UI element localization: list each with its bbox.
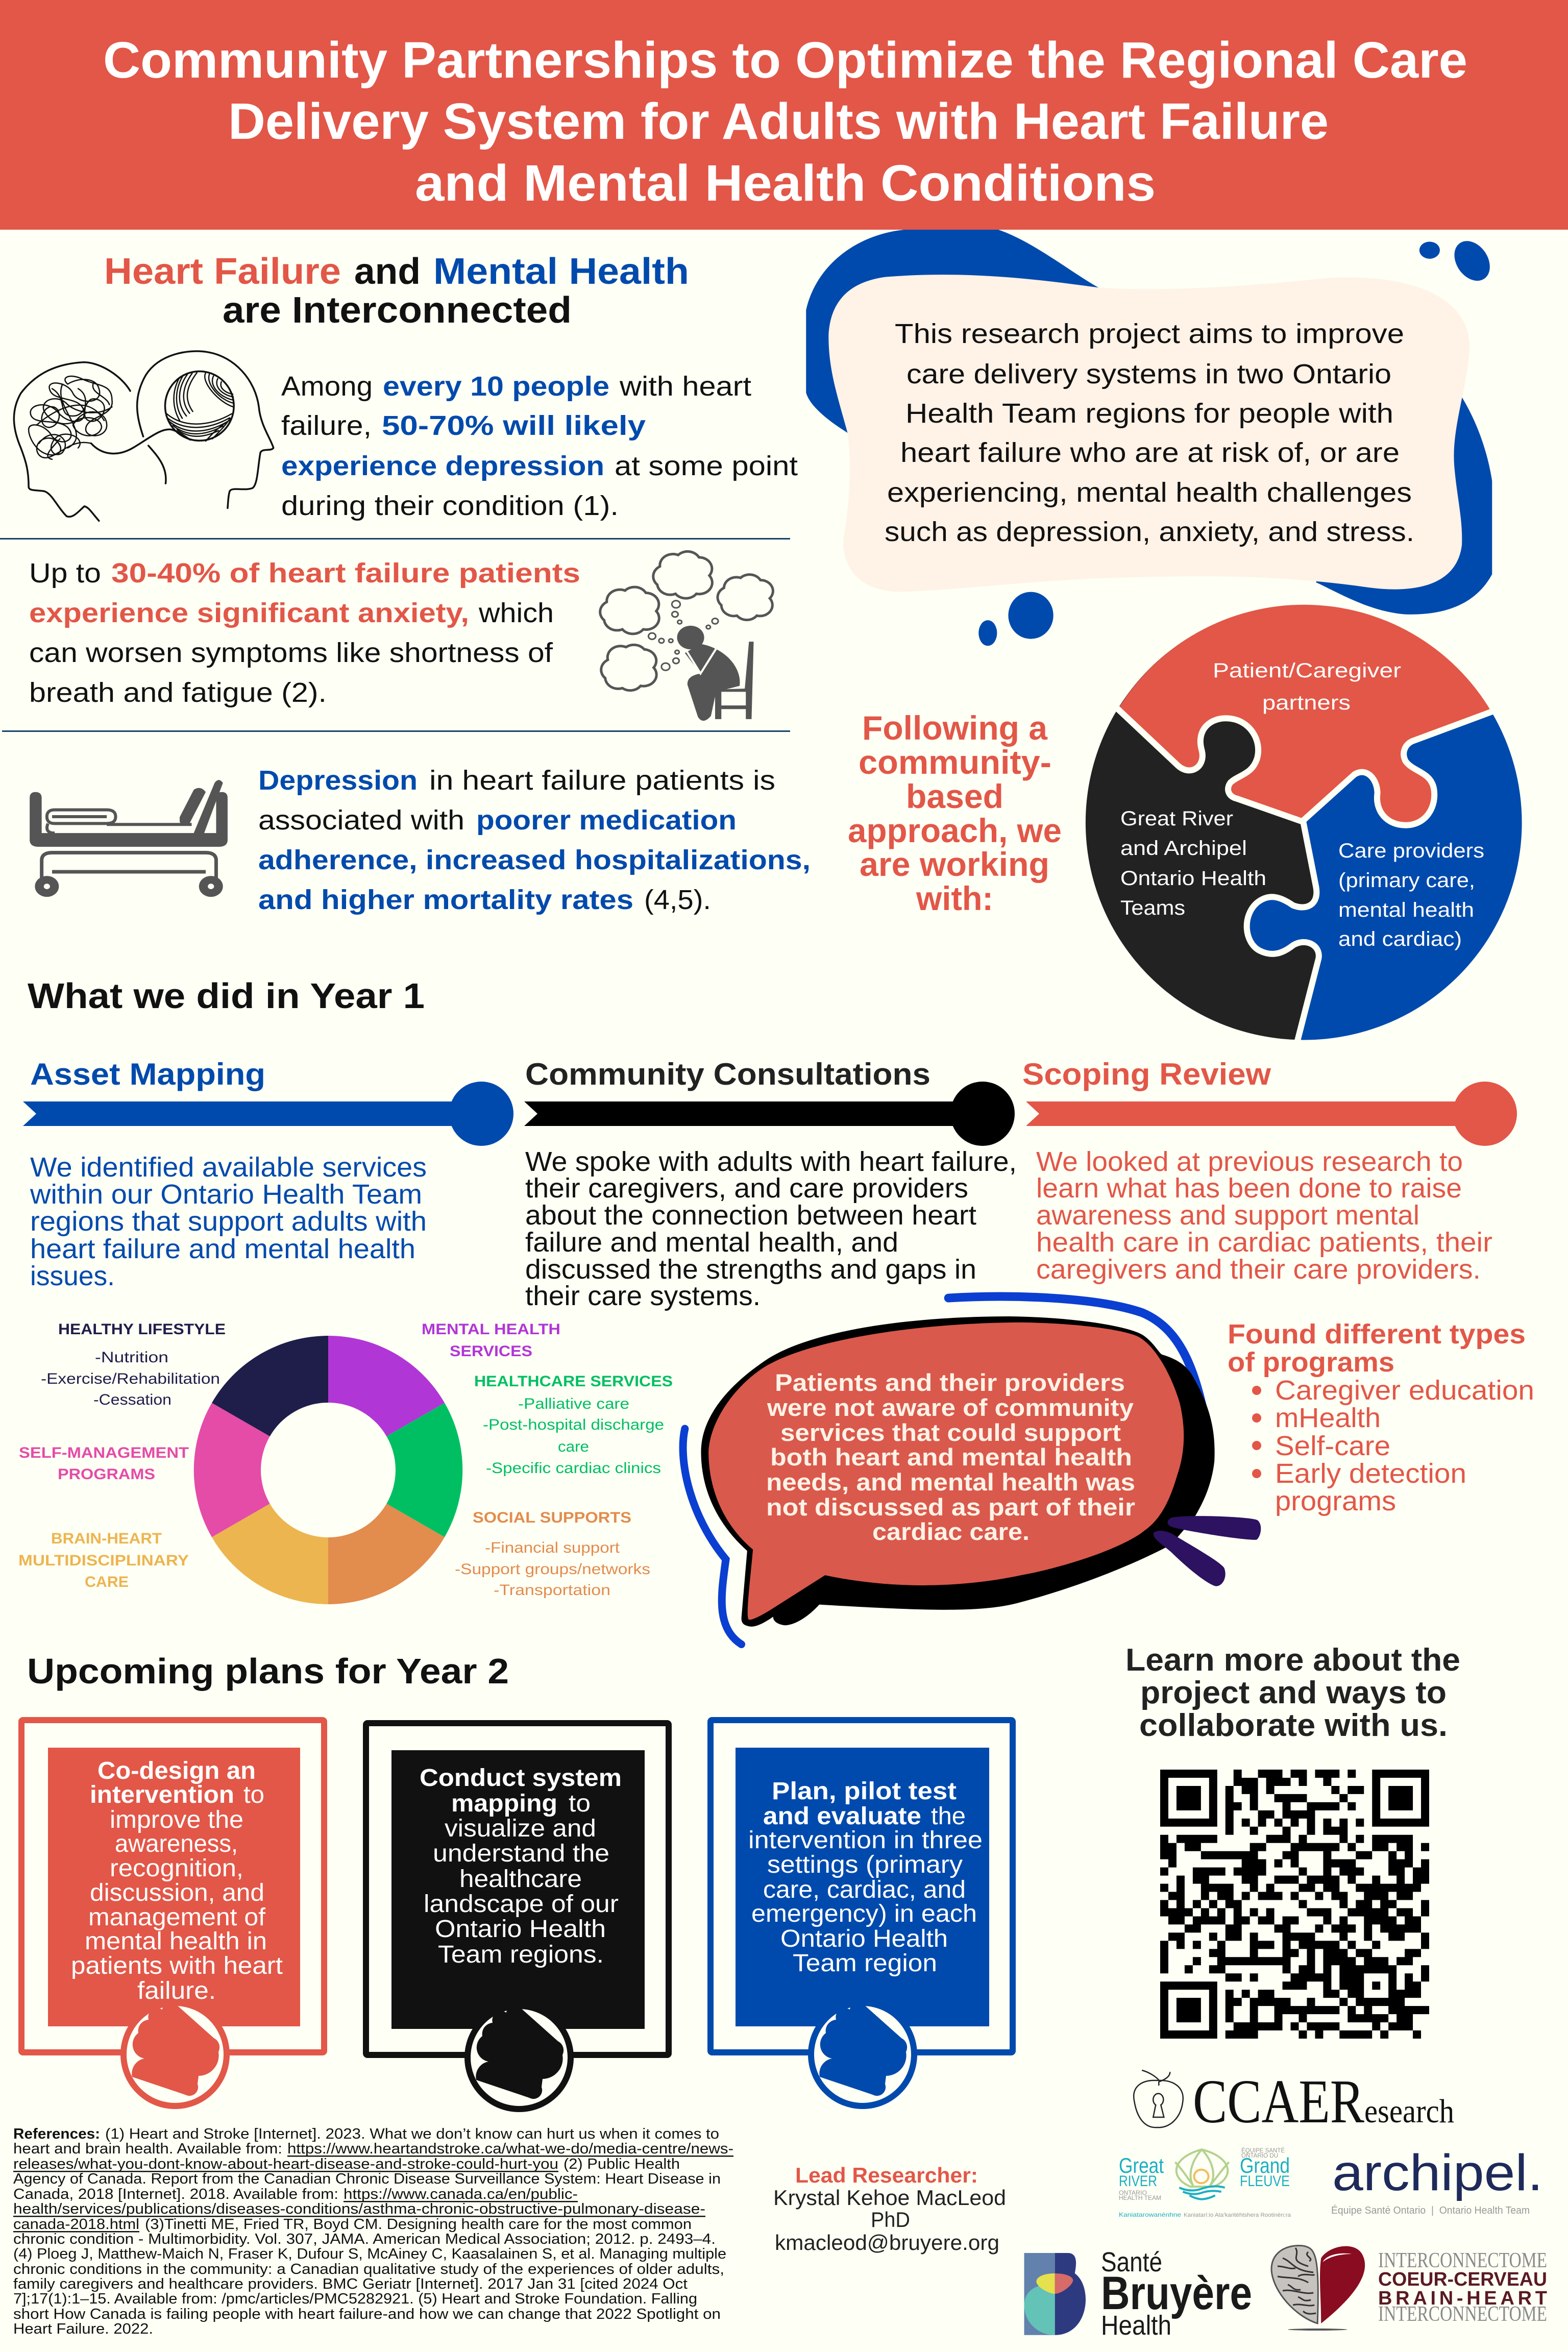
donut label: mental health services [422,1321,560,1360]
text block: references: (2) Public Health [564,2156,680,2172]
panel: co-design card: to [243,1781,264,1808]
donut label: healthy lifestyle: -Exercise/Rehabilitation [41,1370,220,1387]
heading: heart failure and mental health interconnected: Heart Failure [104,251,341,292]
text block: anxiety statistic: which [478,598,554,628]
heading: upcoming plans: Upcoming plans for Year 2 [27,1651,509,1691]
chart: partner puzzle circle: and cardiac) [1338,928,1462,950]
donut label: healthcare services: HEALTHCARE SERVICES [474,1373,673,1390]
chart: partner puzzle circle: Ontario Health [1120,867,1266,890]
heading: learn more: project and ways to [1140,1675,1447,1710]
panel: asset mapping: regions that support adults with [30,1206,427,1237]
icon: tangled brain and yarn heads [14,351,274,521]
callout: speech bubble finding: needs, and mental health was [766,1468,1135,1496]
heading: community-based approach: based [906,777,1003,815]
panel: scoping review [1022,1057,1517,1285]
donut label: mental health services: MENTAL HEALTH [422,1321,560,1338]
donut label: brain-heart multidisciplinary care: BRAIN-HEART [51,1530,162,1547]
chart: partner puzzle circle: and Archipel [1120,837,1247,860]
text block: types of programs list: of programs [1228,1347,1394,1378]
logo: Great River / Grand Fleuve: Grand [1240,2153,1290,2177]
donut label: social supports: SOCIAL SUPPORTS [473,1509,631,1526]
text block: anxiety statistic: can worsen symptoms like shortness of [29,638,553,668]
panel: pilot test card: Plan, pilot test [772,1778,957,1805]
logo: Great River / Grand Fleuve: ÉQUIPE SANTÉ [1241,2146,1285,2154]
panel: asset mapping: heart failure and mental health [30,1234,415,1264]
text block: references: Agency of Canada. Report from the Canadian Chronic Disease Surveillance System: Heart Disease in [13,2171,721,2187]
panel: co-design card: mental health in [85,1928,267,1955]
header banner: Community Partnerships to Optimize the Regional Care [103,32,1467,89]
panel: research aim speech blob: This research project aims to improve [895,318,1404,349]
donut label: healthy lifestyle [41,1321,226,1408]
panel: system mapping card: Ontario Health [435,1916,606,1943]
text block: anxiety statistic: 30-40% of heart failure patients [111,558,580,589]
panel: pilot test card: Ontario Health [780,1925,948,1952]
donut label: social supports [455,1509,650,1599]
text block: types of programs list: Found different types [1228,1319,1526,1350]
panel: asset mapping: issues. [30,1261,115,1291]
logo: Great River / Grand Fleuve: Kaniatarowanénhne [1119,2211,1181,2218]
panel: pilot test card: settings (primary [767,1851,963,1878]
panel: scoping review: awareness and support mental [1036,1200,1419,1231]
logo: Great River / Grand Fleuve: RIVER [1119,2173,1157,2190]
logo: brain-heart interconnectome: COEUR-CERVEAU [1378,2269,1547,2290]
donut label: healthcare services: -Palliative care [518,1395,629,1412]
logo: CCAE Research: esearch [1364,2093,1454,2130]
text block: references: (1) Heart and Stroke [Internet]. 2023. What we don’t know can hurt us when it comes to [105,2126,719,2142]
text block: references: family caregivers and healthcare providers. BMC Geriatr [Internet]. 2017 Jan 31 [cited 2024 Oct [13,2276,688,2292]
icon: hospital bed [30,780,228,897]
panel: asset mapping: We identified available services [30,1152,427,1183]
panel: community consultations: about the connection between heart [525,1200,976,1231]
panel: scoping review: health care in cardiac patients, their [1036,1227,1492,1258]
icon: person with thought clouds [600,551,773,721]
chart: partner puzzle circle: mental health [1338,899,1474,921]
donut label: brain-heart multidisciplinary care [18,1530,189,1590]
panel: research aim speech blob [828,275,1469,592]
panel: community consultations: Community Consultations [525,1057,930,1091]
text block: references: short How Canada is failing people with heart failure-and how we can change that 2022 Spotlight on [13,2306,721,2322]
chart: partner puzzle circle: Teams [1120,897,1185,919]
logo: Bruyère Health: Health [1101,2310,1171,2341]
donut label: healthy lifestyle: HEALTHY LIFESTYLE [58,1321,226,1338]
text block: depression outcomes [258,765,811,915]
text block: anxiety statistic: experience significant anxiety, [29,598,469,628]
panel: system mapping card: healthcare [459,1866,582,1893]
logo: Great River / Grand Fleuve: FLEUVE [1240,2173,1290,2190]
panel: research aim speech blob: such as depression, anxiety, and stress. [885,517,1414,547]
panel: asset mapping: within our Ontario Health Team [30,1179,422,1210]
heading: heart failure and mental health interconnected: are Interconnected [223,290,572,331]
donut label: mental health services: SERVICES [450,1343,532,1360]
panel: asset mapping [23,1057,513,1291]
panel: community consultations: their care systems. [525,1281,761,1311]
text block: anxiety statistic [29,558,580,708]
text block: depression statistic [281,371,798,521]
QR code [1160,1770,1429,2039]
text block: lead researcher: kmacleod@bruyere.org [775,2231,999,2255]
panel: community consultations: discussed the strengths and gaps in [525,1254,976,1285]
panel: scoping review: learn what has been done to raise [1036,1173,1462,1204]
chart: partner puzzle circle [1086,605,1522,1042]
text block: depression outcomes: adherence, increased hospitalizations, [258,845,811,875]
panel: pilot test card: the [931,1803,966,1830]
text block: references: heart and brain health. Available from: [13,2141,282,2157]
logo: CCAE Research [1134,2067,1454,2136]
text block: depression outcomes: poorer medication [476,805,737,836]
text block: depression statistic: failure, [281,410,372,441]
donut label: self-management programs: SELF-MANAGEMENT [19,1444,189,1461]
text block: references [13,2126,733,2337]
chart: partner puzzle circle: partners [1262,692,1351,714]
text block: depression outcomes: (4,5). [644,885,711,915]
donut label: brain-heart multidisciplinary care: MULTIDISCIPLINARY [18,1552,189,1569]
donut label: healthy lifestyle: -Cessation [93,1391,172,1408]
heading: learn more [1125,1643,1460,1743]
heading: community-based approach: community- [859,743,1051,781]
text block: references: https://www.heartandstroke.ca/what-we-do/media-centre/news- [287,2141,733,2157]
text block: depression statistic: 50-70% will likely [382,410,646,441]
panel: system mapping card [366,1723,669,2112]
text block: references: (3)Tinetti ME, Fried TR, Boyd CM. Designing health care for the most common [145,2216,692,2233]
heading: community-based approach: approach, we [848,812,1062,849]
text block: references: Heart Failure. 2022. [13,2321,153,2337]
panel: scoping review: caregivers and their care providers. [1036,1254,1481,1285]
panel: system mapping card: understand the [433,1840,609,1867]
chart: partner puzzle circle: Patient/Caregiver [1213,659,1401,682]
panel: pilot test card: care, cardiac, and [763,1876,966,1903]
panel: pilot test card: intervention in three [748,1827,983,1854]
panel: pilot test card: and evaluate [763,1803,921,1830]
text block: references: References: [13,2126,100,2142]
donut label: self-management programs: PROGRAMS [58,1466,155,1483]
callout: speech bubble finding: services that could support [780,1419,1121,1446]
text block: lead researcher: Krystal Kehoe MacLeod [773,2186,1006,2210]
logo: Great River / Grand Fleuve: ONTARIO DU [1241,2152,1278,2159]
panel: scoping review: We looked at previous research to [1036,1146,1463,1177]
logo: Great River / Grand Fleuve [1119,2146,1291,2218]
text block: references: 7];17(1):1–15. Available from: /pmc/articles/PMC5282921. (5) Heart and Stroke Foundation. Falling [13,2291,697,2307]
callout: speech bubble finding: both heart and mental health [770,1443,1132,1471]
logo: Great River / Grand Fleuve: ONTARIO [1119,2189,1147,2196]
donut label: social supports: -Financial support [485,1539,620,1556]
panel: system mapping card: landscape of our [424,1891,619,1918]
callout: speech bubble finding: Patients and their providers [775,1369,1125,1396]
logo: archipel: archipel. [1332,2144,1543,2201]
text block: anxiety statistic: Up to [29,558,101,589]
text block: references: releases/what-you-dont-know-about-heart-disease-and-stroke-could-hurt-you [13,2156,558,2172]
text block: lead researcher: Lead Researcher: [795,2163,978,2187]
logo: Bruyère Health: Bruyère [1101,2267,1252,2319]
panel: community consultations: their caregivers, and care providers [525,1173,968,1204]
callout: speech bubble finding: not discussed as part of their [766,1493,1135,1521]
chart: partner puzzle circle: Great River [1120,807,1233,830]
panel: co-design card: improve the [110,1806,243,1833]
panel: system mapping card: Team regions. [438,1941,604,1968]
donut label: brain-heart multidisciplinary care: CARE [85,1574,129,1590]
panel: pilot test card [710,1720,1013,2109]
text block: references: canada-2018.html [13,2216,139,2233]
heading: community-based approach: Following a [862,709,1048,747]
panel: co-design card: intervention [90,1781,234,1808]
callout: speech bubble finding: were not aware of community [767,1394,1134,1421]
panel: co-design card: Co-design an [97,1757,256,1784]
logo: Bruyère Health [1024,2247,1252,2341]
chart: services donut [194,1336,462,1604]
heading: learn more: collaborate with us. [1139,1708,1448,1743]
text block: depression statistic: at some point [615,451,798,481]
text block: references: https://www.canada.ca/en/public- [344,2186,578,2202]
heading: learn more: Learn more about the [1125,1643,1460,1678]
text block: types of programs list: Caregiver education [1275,1375,1534,1406]
text block: depression statistic: Among [281,371,373,402]
donut label: healthy lifestyle: -Nutrition [95,1349,168,1366]
panel: research aim speech blob: heart failure who are at risk of, or are [900,437,1400,468]
donut label: healthcare services: -Specific cardiac clinics [486,1460,661,1477]
text block: types of programs list: programs [1275,1486,1396,1516]
heading: what we did in year 1: What we did in Year 1 [28,976,425,1016]
panel: system mapping card: Conduct system [420,1765,622,1792]
text block: depression outcomes: and higher mortality rates [258,885,633,915]
panel: co-design card: discussion, and [90,1879,264,1906]
donut label: self-management programs [19,1444,189,1483]
header banner: and Mental Health Conditions [415,155,1156,212]
text block: depression outcomes: in heart failure patients is [429,765,775,796]
text block: depression statistic: with heart [619,371,751,402]
panel: co-design card: recognition, [110,1855,243,1882]
text block: lead researcher: PhD [871,2208,910,2232]
panel: co-design card: management of [88,1904,266,1931]
text block: anxiety statistic: breath and fatigue (2). [29,677,327,708]
heading: community-based approach: are working [860,845,1049,883]
donut label: social supports: -Support groups/networks [455,1561,650,1578]
text block: types of programs list: mHealth [1275,1403,1381,1433]
heading: community-based approach [848,709,1062,917]
text block: references: (4) Ploeg J, Matthew-Maich N, Fraser K, Dufour S, McAiney C, Kaasalainen S, et al. Managing multiple [13,2246,726,2262]
panel: co-design card: failure. [137,1977,216,2004]
panel: co-design card: awareness, [115,1830,238,1857]
header banner [0,0,1568,230]
callout: speech bubble finding: cardiac care. [872,1518,1030,1545]
chart: partner puzzle circle: (primary care, [1338,869,1475,892]
logo: Great River / Grand Fleuve: Great [1119,2153,1164,2177]
heading: heart failure and mental health interconnected [104,251,689,331]
panel: research aim speech blob: care delivery systems in two Ontario [906,359,1391,389]
logo: brain-heart interconnectome: BRAIN-HEART [1378,2288,1547,2309]
logo: Bruyère Health: Santé [1101,2247,1162,2277]
donut label: healthcare services: -Post-hospital discharge [483,1416,664,1433]
heading: heart failure and mental health interconnected: and [354,251,421,292]
panel: system mapping card: mapping [451,1790,557,1817]
logo: Great River / Grand Fleuve: Kaniatarí:io Ata’karitéhtshera Rootinèn:ra [1184,2212,1291,2218]
text block: depression statistic: experience depression [281,451,604,481]
logo: Great River / Grand Fleuve: HEALTH TEAM [1119,2194,1161,2201]
text block: types of programs list: Early detection [1275,1458,1466,1489]
donut label: healthcare services: care [558,1438,589,1455]
text block: depression statistic: every 10 people [383,371,609,402]
panel: system mapping card: visualize and [445,1815,596,1842]
text block: references: Canada, 2018 [Internet]. 2018. Available from: [13,2186,338,2202]
text block: references: chronic condition - Multimorbidity. Vol. 307, JAMA. American Medical Association; 2012. p. 2493–4. [13,2231,716,2247]
logo: archipel: Équipe Santé Ontario | Ontario Health Team [1331,2204,1530,2216]
panel: asset mapping: Asset Mapping [30,1057,265,1091]
panel: system mapping card: to [569,1790,591,1817]
blue blob behind aim statement [806,229,1497,646]
panel: research aim speech blob: experiencing, mental health challenges [887,477,1412,508]
header banner: Delivery System for Adults with Heart Failure [228,93,1329,150]
panel: community consultations: We spoke with adults with heart failure, [525,1146,1017,1177]
text block: references: health/services/publications/diseases-conditions/asthma-chronic-obstructive-pulmonary-disease- [13,2201,705,2217]
panel: pilot test card: emergency) in each [751,1900,977,1927]
logo: brain-heart interconnectome [1271,2246,1547,2331]
panel: co-design card [21,1720,324,2109]
text block: lead researcher [773,2163,1006,2255]
text block: references: chronic conditions in the community: a Canadian qualitative study of the experiences of older adults, [13,2261,724,2277]
text block: depression outcomes: Depression [258,765,418,796]
text block: types of programs list [1228,1319,1534,1516]
chart: partner puzzle circle: Care providers [1338,840,1484,862]
panel: co-design card: patients with heart [71,1952,283,1979]
text block: depression statistic: during their condition (1). [281,491,619,521]
donut label: healthcare services [474,1373,673,1477]
panel: scoping review: Scoping Review [1022,1057,1271,1091]
panel: community consultations [524,1057,1017,1311]
text block: depression outcomes: associated with [258,805,464,836]
callout: speech bubble finding [683,1296,1261,1645]
logo: CCAE Research: CCAER [1193,2067,1365,2136]
panel: community consultations: failure and mental health, and [525,1227,898,1258]
heading: community-based approach: with: [916,879,993,917]
panel: research aim speech blob: Health Team regions for people with [905,398,1393,429]
text block: types of programs list: Self-care [1275,1431,1390,1461]
panel: pilot test card: Team region [793,1950,937,1977]
donut label: social supports: -Transportation [494,1582,610,1599]
heading: heart failure and mental health interconnected: Mental Health [433,251,689,292]
